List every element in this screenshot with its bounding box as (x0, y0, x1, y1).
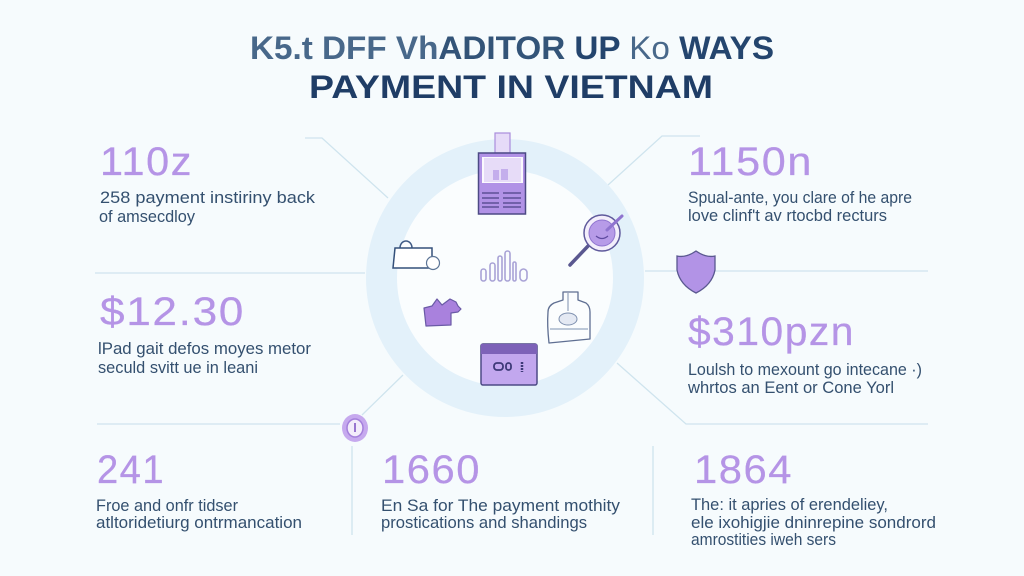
central ring (382, 154, 628, 402)
stat: $12.30: lPad gait defos moyes metor (98, 339, 311, 358)
stat: 1660: prostications and shandings (381, 513, 587, 532)
stat: 110z: 258 payment instiriny back (100, 188, 316, 207)
title: PAYMENT IN VIETNAM (309, 69, 713, 105)
stat: 241 (96, 448, 302, 532)
stat: 1150n: 1150n (688, 140, 813, 184)
stat: 1660: 1660 (382, 448, 481, 492)
title (250, 30, 774, 105)
stat: 1864 (691, 448, 936, 549)
stat: 110z (99, 140, 316, 226)
icon: badge (342, 414, 368, 442)
icon: payment terminal (548, 292, 590, 343)
stat: $310pzn: whrtos an Eent or Cone Yorl (687, 378, 894, 397)
stat: 241: Froe and onfr tidser (96, 496, 238, 515)
stat: 1660: En Sa for The payment mothity (381, 496, 621, 515)
stat: $12.30 (98, 290, 311, 377)
stat: $310pzn (687, 310, 922, 397)
icon: purple hand (424, 299, 461, 326)
icon: payment card (481, 344, 537, 385)
stat: 1150n (688, 140, 912, 225)
icon: shield (677, 251, 715, 293)
stat: $12.30: seculd svitt ue in leani (98, 358, 258, 377)
icon: wallet with lock (393, 241, 440, 270)
icon: magnifier (570, 215, 622, 265)
stat: 241: atltoridetiurg ontrmancation (96, 513, 302, 532)
icon: document (478, 133, 526, 214)
stat: 1150n: love clinf't av rtocbd recturs (688, 206, 887, 225)
title: K5.t DFF VhADITOR UP Ko WAYS (250, 30, 774, 66)
stat: 1660 (381, 448, 621, 532)
stat: $310pzn: $310pzn (688, 310, 855, 354)
icon: centre bars (481, 251, 527, 281)
stat: 1150n: Spual-ante, you clare of he apre (688, 188, 912, 207)
stat: 241: 241 (97, 448, 165, 492)
stat: 110z: 110z (100, 140, 193, 184)
stat: 110z: of amsecdloy (99, 207, 195, 226)
stat: 1864: 1864 (694, 448, 793, 492)
stat: 1864: amrostities iweh sers (691, 530, 836, 549)
stat: 1864: ele ixohigjie dninrepine sondrord (691, 513, 936, 532)
stat: $12.30: $12.30 (100, 290, 245, 334)
stat: $310pzn: Loulsh to mexount go intecane ·) (688, 360, 922, 379)
stat: 1864: The: it apries of erendeliey, (691, 495, 888, 514)
